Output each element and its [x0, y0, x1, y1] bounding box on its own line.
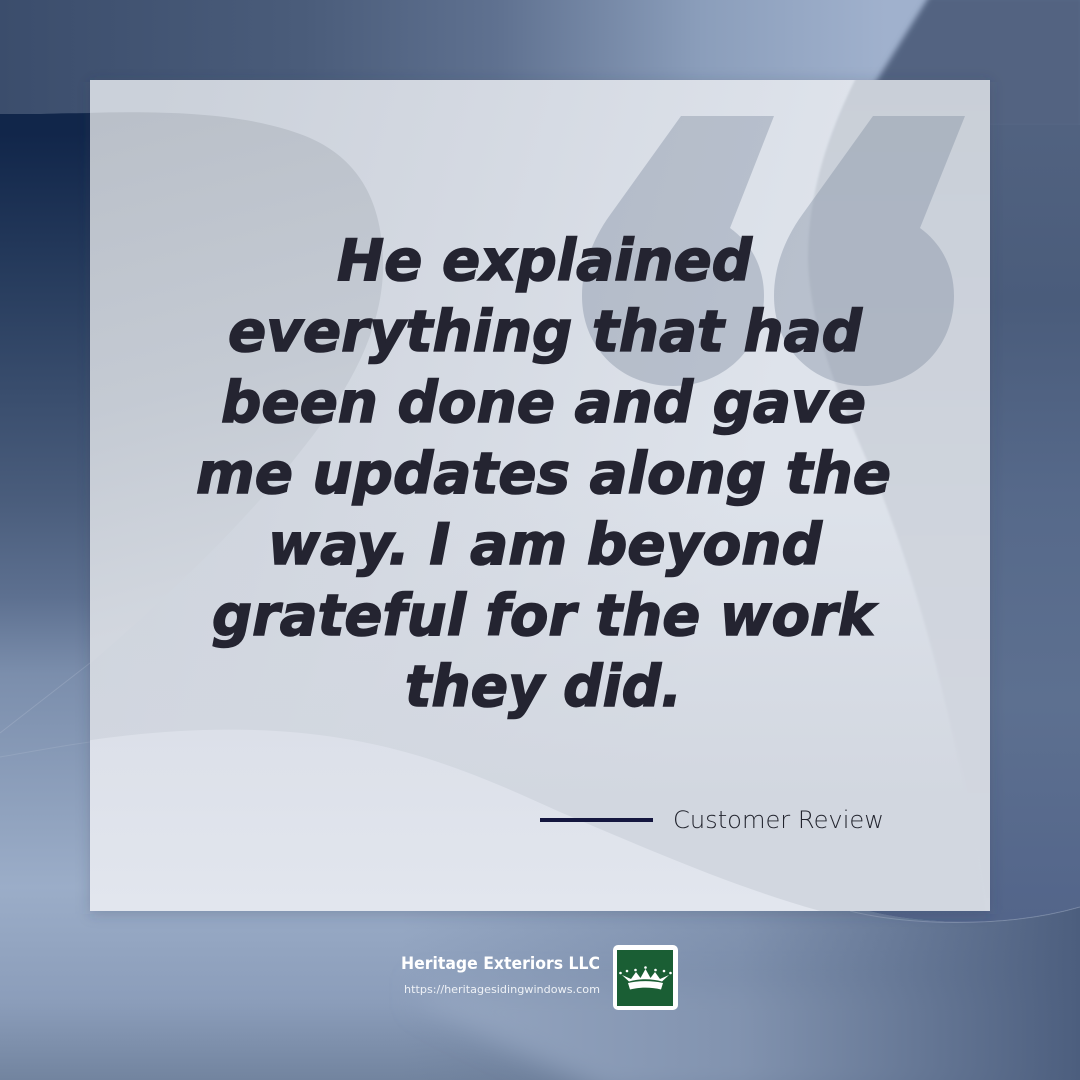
- icon: quotation mark: [582, 116, 965, 386]
- quote text: He explained: [337, 228, 753, 294]
- footer: company name: Heritage Exteriors LLC: [401, 954, 600, 974]
- icon: crown: [619, 966, 672, 990]
- panel shadow: [90, 82, 990, 914]
- logo: [613, 945, 678, 1010]
- quote text: grateful for the work: [212, 583, 878, 649]
- attribution rule: [540, 818, 653, 822]
- quote text: me updates along the: [196, 441, 891, 507]
- quote text: way. I am beyond: [268, 512, 823, 578]
- panel: review card: [85, 78, 995, 915]
- quote text: been done and gave: [221, 370, 866, 436]
- quote text: they did.: [405, 654, 682, 720]
- attribution text: Customer Review: [673, 806, 884, 834]
- footer: website: https://heritagesidingwindows.com: [404, 983, 600, 996]
- quote text: [196, 228, 891, 720]
- quote text: everything that had: [228, 299, 863, 365]
